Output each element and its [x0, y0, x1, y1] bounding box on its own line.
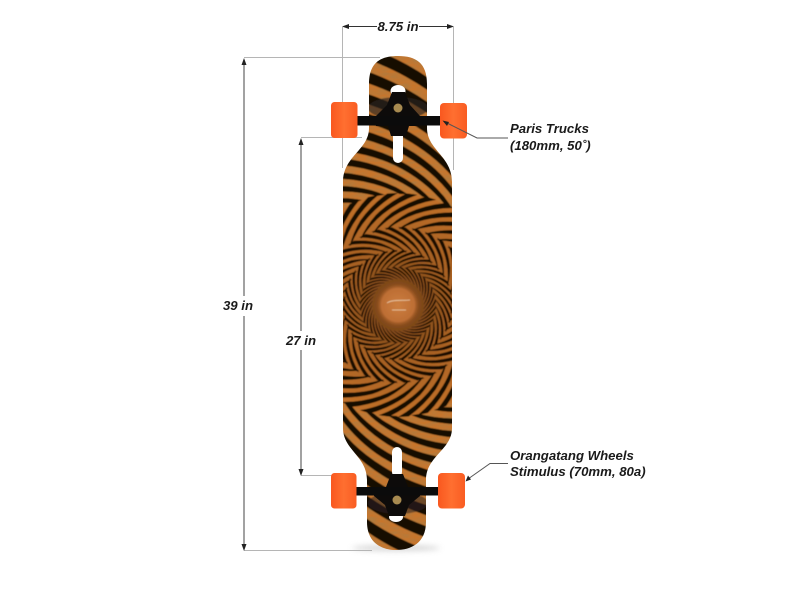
- left wheel: [331, 473, 356, 508]
- wood grain: [343, 56, 452, 548]
- right wheel: [440, 103, 467, 138]
- band 2 swirl: [343, 226, 452, 384]
- slot: bottom: [392, 447, 402, 477]
- hanger: [357, 116, 441, 126]
- dimension: length 39 in: 39 in: [223, 298, 253, 313]
- hub logo marks: [387, 300, 410, 310]
- outer swirl stripes: [343, 56, 452, 550]
- dimension: wheelbase 27 in: 27 in: [285, 333, 316, 348]
- wood base: [343, 56, 452, 550]
- top truck: [331, 92, 467, 138]
- dimension: width 8.75 in: 8.75 in: [377, 19, 419, 34]
- right wheel: [438, 473, 465, 508]
- baseplate: [376, 92, 420, 136]
- band 3 swirl: [343, 192, 452, 418]
- callout: Orangatang Wheels: Orangatang Wheels: [510, 448, 634, 463]
- dark area under top truck: [369, 97, 427, 116]
- shadow under board: [352, 545, 440, 551]
- hole: top: [390, 85, 406, 97]
- kingpin: [394, 104, 402, 112]
- band 1 swirl: [343, 250, 452, 360]
- bottom truck: [331, 473, 465, 516]
- dimension: wheelbase 27 in: [285, 138, 316, 476]
- callout: Paris Trucks: (180mm, 50˚): [510, 138, 591, 153]
- callout: Orangatang Wheels: [466, 448, 646, 482]
- callout: Orangatang Wheels: Stimulus (70mm, 80a): [510, 464, 646, 479]
- hole: bottom: [389, 512, 403, 522]
- extension lines: [244, 27, 454, 550]
- baseplate: [374, 474, 420, 516]
- kingpin: [392, 496, 402, 504]
- core swirl: [359, 266, 436, 344]
- longboard: [331, 56, 467, 550]
- center shading: [343, 198, 452, 412]
- dimension: width 8.75 in: [342, 19, 454, 34]
- dimension: length 39 in: [223, 58, 253, 551]
- inner wood disc: [343, 193, 452, 417]
- center hub: [378, 285, 418, 325]
- slot: top: [393, 130, 403, 163]
- hanger: [356, 487, 440, 496]
- callout: Paris Trucks: Paris Trucks: [510, 121, 589, 136]
- dark area under bottom truck: [368, 496, 426, 514]
- deck: [343, 56, 452, 550]
- left wheel: [331, 102, 358, 138]
- callout: Paris Trucks: [442, 120, 591, 153]
